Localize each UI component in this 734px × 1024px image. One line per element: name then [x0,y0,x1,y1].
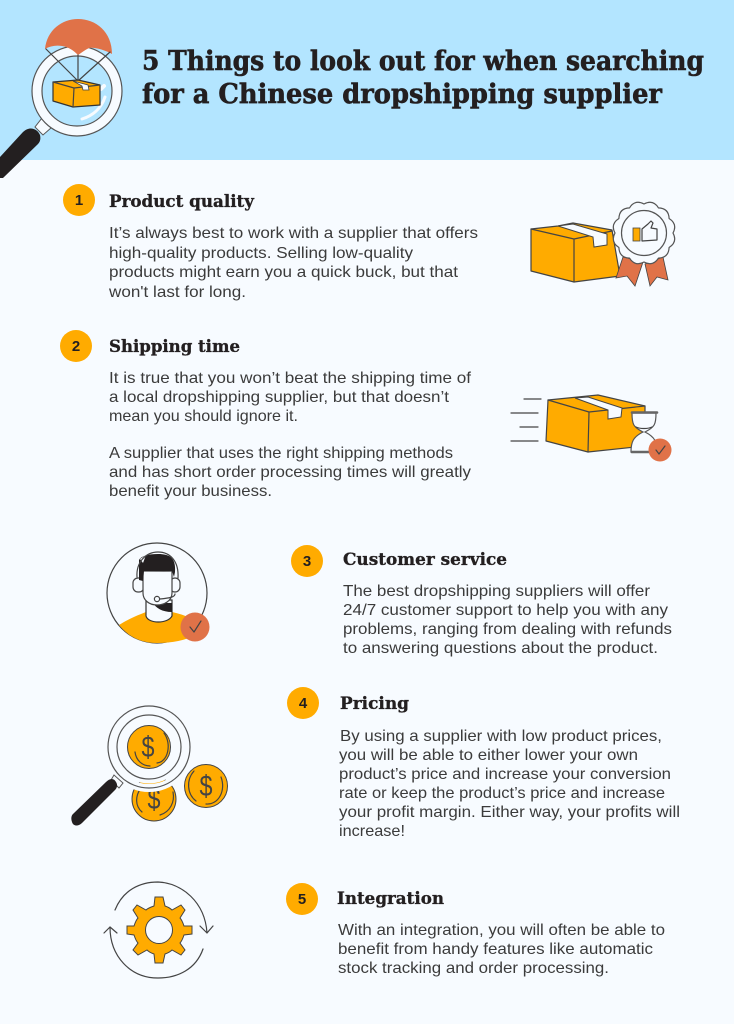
heading: customer service: Customer service [343,550,507,570]
text: pricing: By using a supplier with low product prices, [340,728,662,745]
text: product quality: It’s always best to work with a supplier that offers [109,225,478,242]
icon: box with hourglass and speed lines [511,395,672,462]
number badge 3 [291,545,323,577]
section 2: shipping time [60,330,672,500]
section 1: product quality [63,184,675,301]
text: pricing: rate or keep the product’s price and increase [339,785,665,802]
title: 5 Things to look out for when searching [142,46,704,77]
section 5: integration [104,882,665,978]
text: pricing: increase! [339,823,405,840]
title [142,46,704,110]
text: product quality: won't last for long. [108,284,246,301]
text: integration: benefit from handy features like automatic [338,941,653,958]
number badge 5: 5 [298,891,306,908]
section 3: customer service [107,543,672,657]
text: product quality: products might earn you a quick buck, but that [109,264,459,281]
number badge 3: 3 [303,553,311,570]
text: pricing: you will be able to either lower your own [339,747,638,764]
number badge 1 [63,184,95,216]
text: shipping time: a local dropshipping supplier, but that doesn’t [109,389,450,406]
section 4: pricing [71,687,680,840]
text: product quality [108,225,478,301]
text: shipping time: It is true that you won’t beat the shipping time of [109,370,472,387]
text: customer service: to answering questions about the product. [343,640,658,657]
icon: gear with circular arrows [104,882,213,978]
text: shipping time: A supplier that uses the right shipping methods [109,445,453,462]
text: shipping time: benefit your business. [109,483,272,500]
text: pricing: your profit margin. Either way, your profits will [339,804,680,821]
heading: integration: Integration [337,889,444,909]
number badge 5 [286,883,318,915]
title: for a Chinese dropshipping supplier [142,79,663,110]
icon: magnifying glass over coins [71,706,228,826]
text: shipping time [109,370,472,500]
number badge 1: 1 [75,192,83,209]
text: customer service: problems, ranging from dealing with refunds [343,621,672,638]
header banner [0,0,734,160]
number badge 2: 2 [72,338,80,355]
icon: magnifying glass over coins: $ [142,731,155,764]
icon: parachute box under magnifying glass [0,19,122,178]
text: pricing [339,728,680,840]
heading: product quality: Product quality [109,192,255,212]
text: shipping time: mean you should ignore it. [109,408,298,425]
text: customer service: The best dropshipping suppliers will offer [343,583,650,600]
number badge 4 [287,687,319,719]
text: integration [338,922,665,977]
text: customer service [343,583,672,657]
text: customer service: 24/7 customer support to help you with any [343,602,668,619]
text: shipping time: and has short order processing times will greatly [109,464,471,481]
text: pricing: product’s price and increase your conversion [339,766,671,783]
icon: box with quality badge [531,202,675,286]
number badge 4: 4 [299,695,308,712]
heading: pricing: Pricing [340,694,409,714]
text: integration: stock tracking and order processing. [338,960,609,977]
number badge 2 [60,330,92,362]
icon: magnifying glass over coins: $ [200,770,213,803]
text: integration: With an integration, you will often be able to [338,922,665,939]
icon: support agent with headset [107,543,210,643]
icon: magnifying glass over coins: $ [148,783,161,816]
text: product quality: high-quality products. Selling low-quality [109,245,413,262]
heading: shipping time: Shipping time [109,337,240,357]
